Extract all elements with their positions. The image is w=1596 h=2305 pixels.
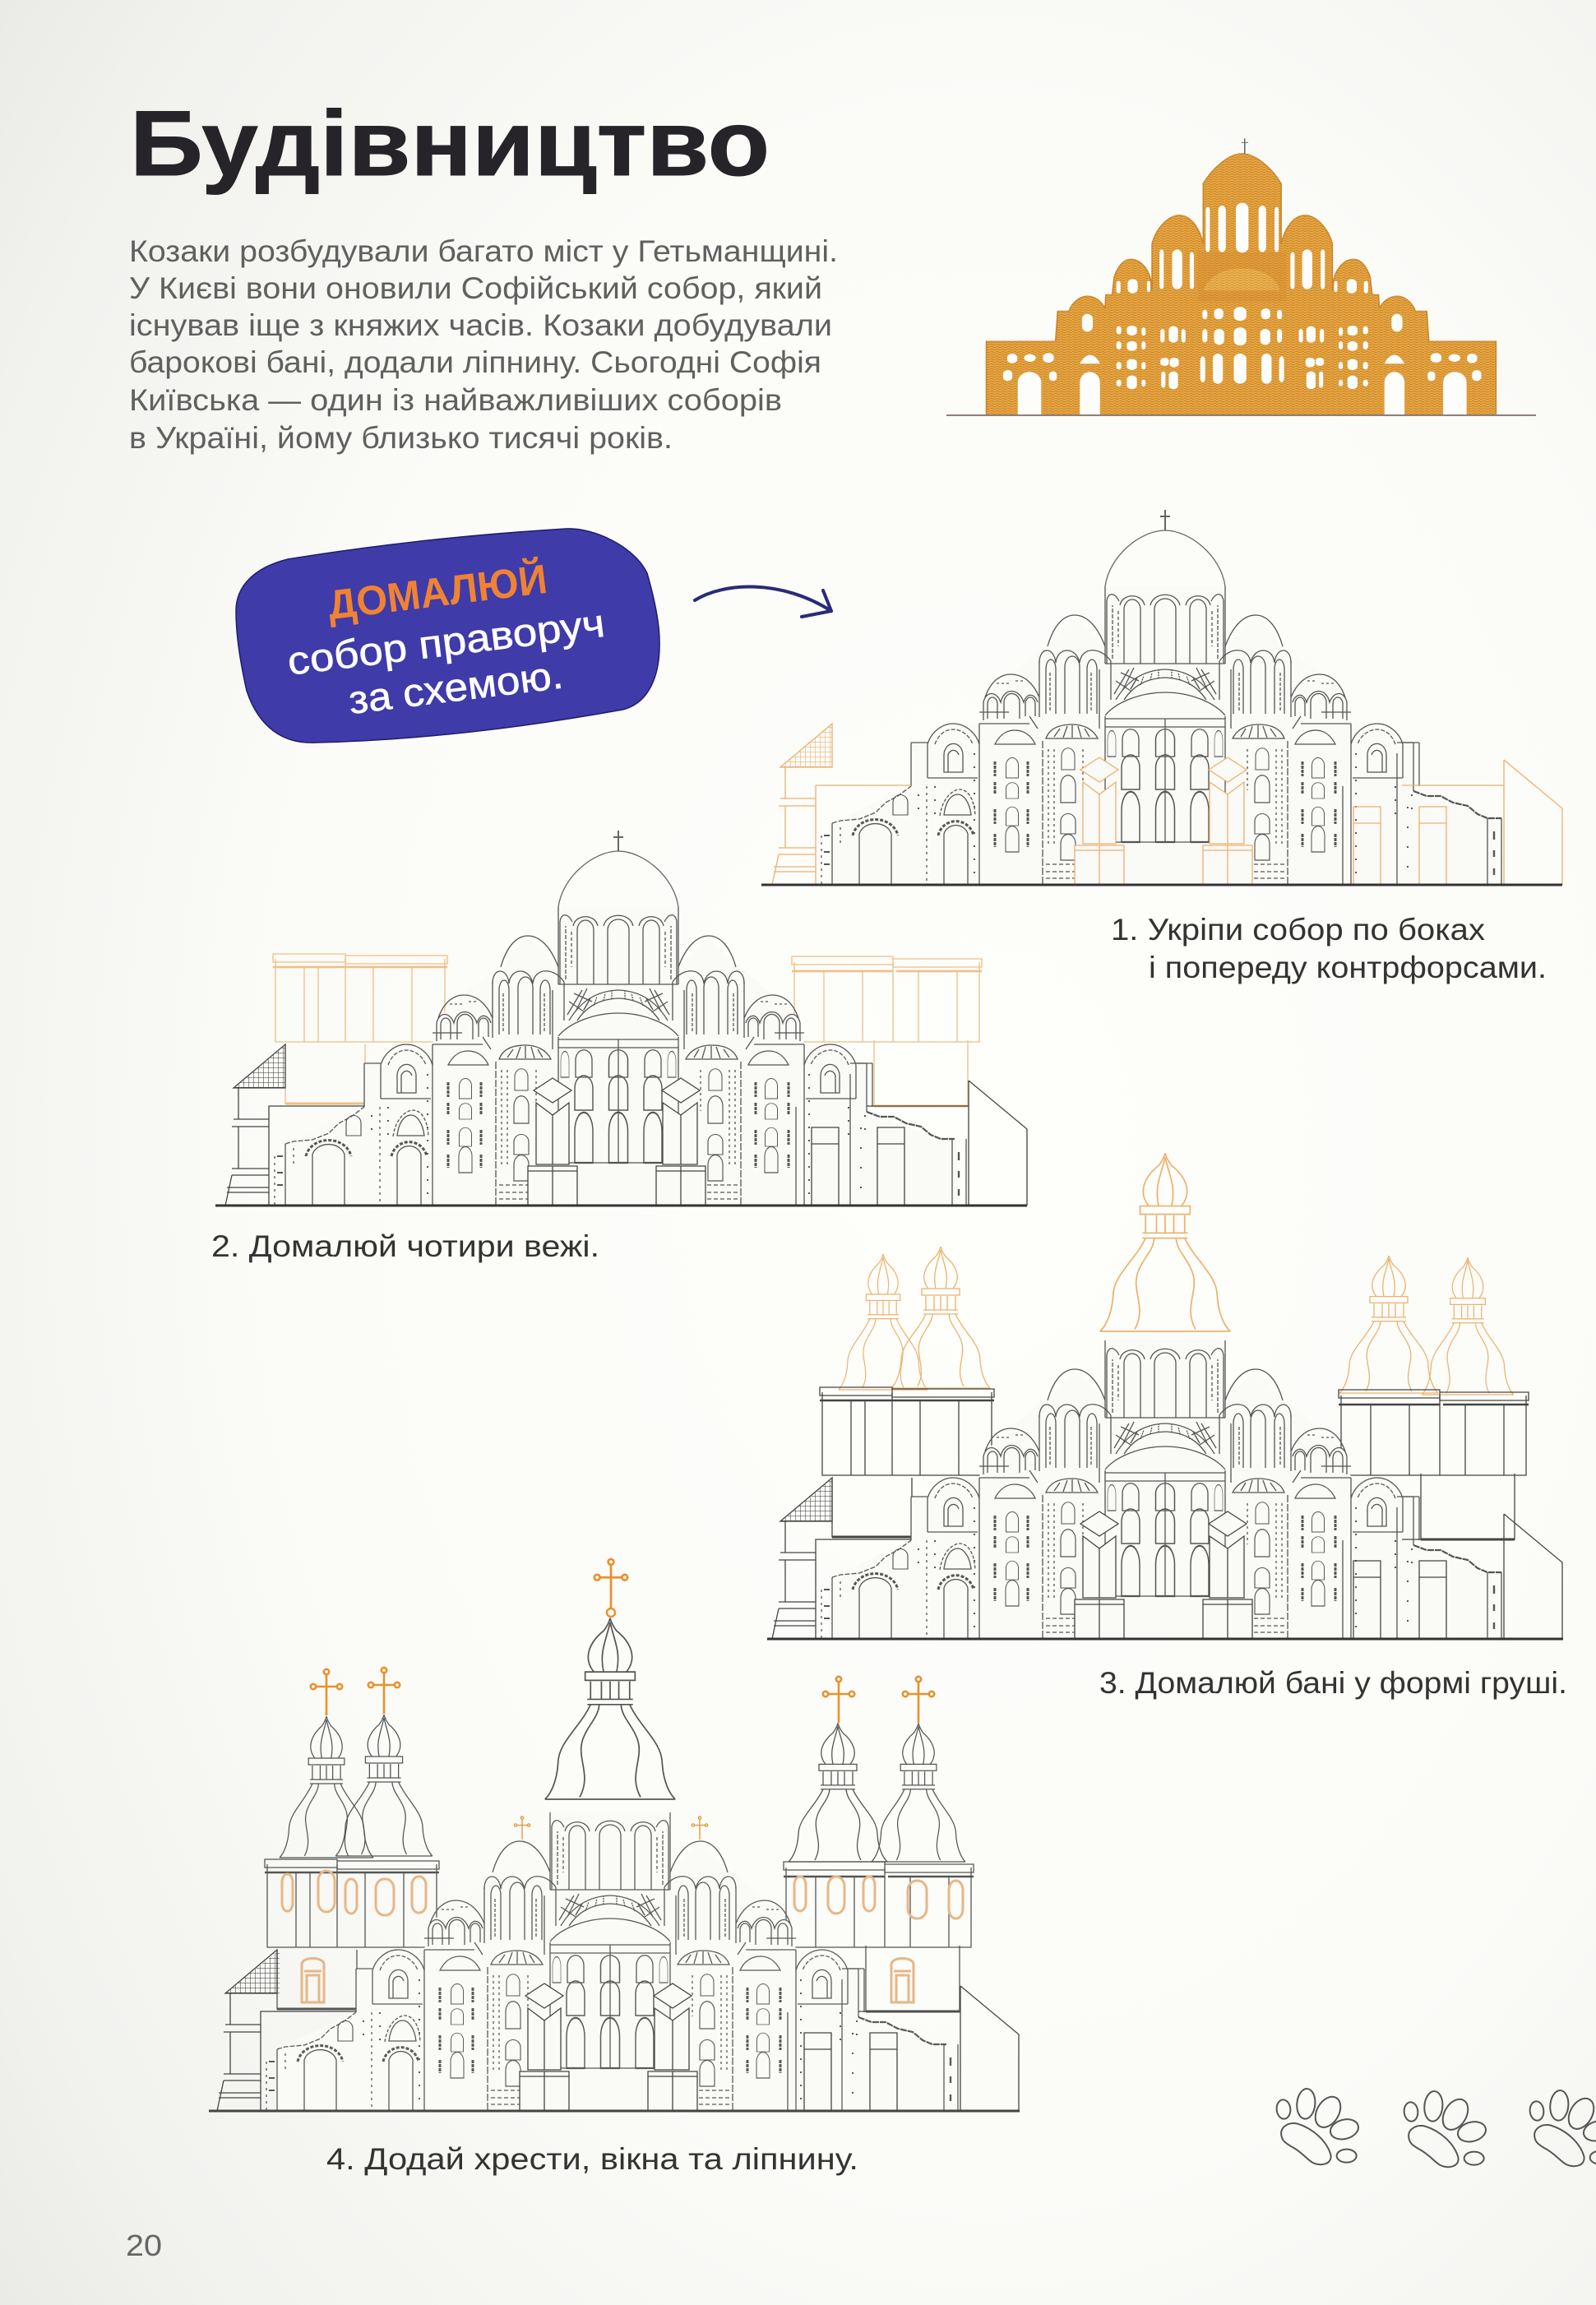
step 1 caption: 1. Укріпи собор по боках [1111, 913, 1486, 947]
step 1 drawing [761, 510, 1562, 885]
step 1 caption: і попереду контрфорсами. [1149, 951, 1547, 984]
callout: instruction blob [236, 529, 659, 743]
intro text block: існував іще з княжих часів. Козаки добудували [129, 308, 832, 342]
step 1 caption [1111, 913, 1547, 984]
orange crosses [311, 1559, 934, 1840]
step 4 caption: 4. Додай хрести, вікна та ліпнину. [326, 2142, 858, 2176]
callout text [279, 548, 613, 729]
icon: paw prints [1276, 2088, 1596, 2167]
arrow [695, 586, 831, 617]
callout text: ДОМАЛЮЙ [325, 555, 549, 628]
step 3 caption: 3. Домалюй бані у формі груші. [1099, 1666, 1567, 1700]
step 4 drawing [209, 1559, 1020, 2111]
callout text: за схемою. [346, 653, 566, 723]
intro text block: барокові бані, додали ліпнину. Сьогодні Софія [129, 345, 821, 379]
callout text: собор праворуч [285, 602, 607, 684]
page number: 20 [126, 2229, 162, 2262]
intro text block: У Києві вони оновили Софійський собор, який [129, 271, 822, 305]
coloured cathedral illustration [946, 138, 1536, 415]
intro text block: Козаки розбудували багато міст у Гетьманщині. [129, 234, 838, 268]
step 3 drawing [767, 1153, 1563, 1639]
title: Будівництво [130, 92, 770, 195]
intro text block: Київська — один із найважливіших соборів [129, 383, 782, 417]
orange windows [282, 1871, 963, 2002]
intro text block [129, 234, 838, 455]
step 2 drawing [215, 831, 1027, 1206]
intro text block: в Україні, йому близько тисячі років. [129, 421, 673, 455]
step 2 caption: 2. Домалюй чотири вежі. [211, 1229, 599, 1263]
